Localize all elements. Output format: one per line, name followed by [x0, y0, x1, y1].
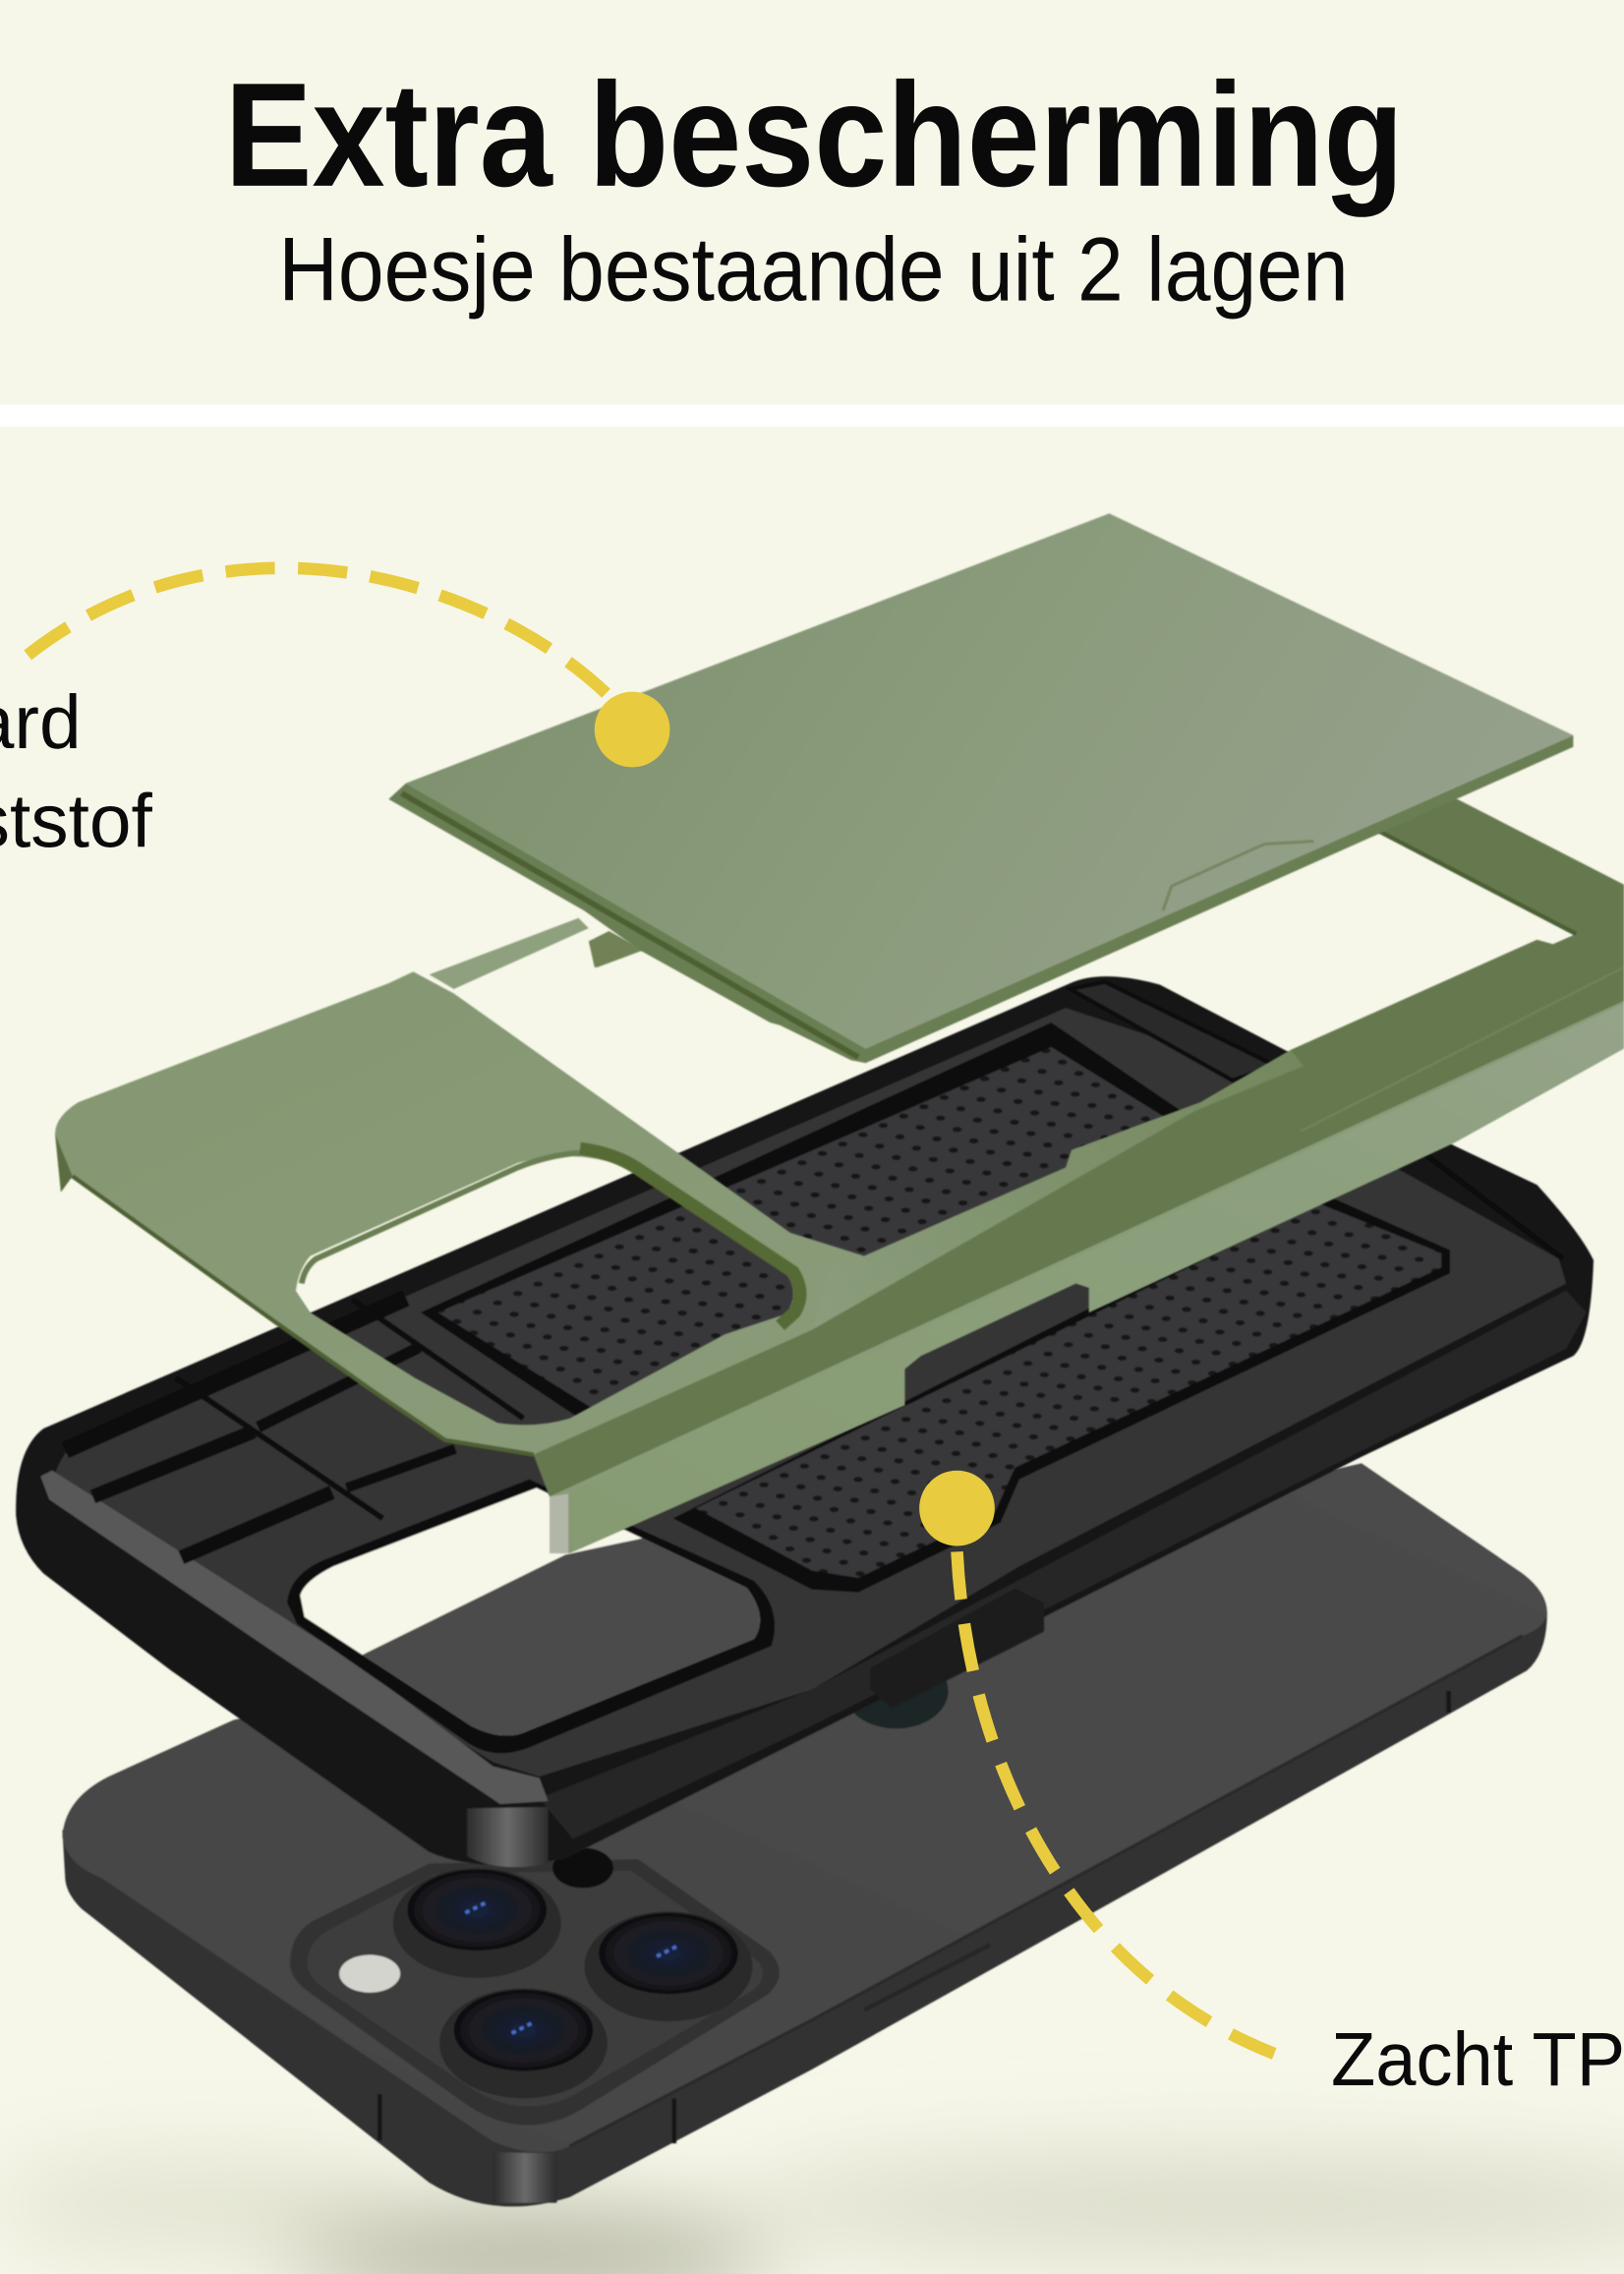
lens bottom [439, 1988, 608, 2098]
case body [16, 976, 1594, 1865]
phone side wall [62, 1566, 1547, 2206]
dark band and end bar [534, 794, 1624, 1496]
right compartment line [1414, 1145, 1563, 1258]
flash [339, 1954, 400, 1993]
phone back face [62, 1463, 1547, 2152]
side button [864, 1945, 990, 2010]
lower light strip [552, 1004, 1624, 1553]
subtitle: Hoesje bestaande uit 2 lagen [278, 219, 1349, 320]
marker dot top [595, 692, 669, 767]
upper perforated pad [421, 1022, 1233, 1429]
top compartment [1071, 982, 1276, 1080]
lid top surface [406, 513, 1573, 1049]
rim corner highlight [467, 1807, 549, 1867]
port shadow on phone [843, 1654, 949, 1728]
phone edge line [570, 1636, 1523, 2146]
camera opening [299, 1487, 761, 1736]
upper band strip [812, 1050, 1304, 1330]
frame left tab shade [55, 1135, 73, 1193]
hole rim shading right [580, 1148, 800, 1325]
phone [62, 1463, 1547, 2206]
dashed connector top [22, 568, 607, 693]
lower perforated pad [672, 1193, 1450, 1593]
title: Extra bescherming [225, 52, 1404, 217]
grey rim [40, 1471, 549, 1804]
microphone hole [552, 1847, 613, 1889]
callout: hard plastic [0, 568, 669, 864]
callout: soft TPU [919, 1471, 1624, 2102]
dashed connector bottom [957, 1551, 1277, 2055]
left compartment dividers [65, 1298, 523, 1557]
frame plate lower edge [73, 1176, 534, 1455]
hole rim shading left [302, 1153, 580, 1283]
camera island [290, 1847, 780, 2126]
frame tab [589, 931, 644, 967]
phone antenna seams [379, 1691, 1449, 2143]
lid slot outline [1163, 842, 1313, 910]
lens top [393, 1868, 561, 1978]
green hard frame [55, 794, 1624, 1553]
lid edge [388, 735, 1573, 1063]
lid edge dark line [402, 793, 858, 1057]
rail behind lid [430, 918, 589, 989]
TPU inner case [16, 976, 1594, 1867]
lower lip of case [540, 1291, 1587, 1838]
phone corner highlight [493, 2152, 556, 2203]
frame base shape [55, 794, 1624, 1553]
lens right [584, 1911, 753, 2021]
marker dot bottom [919, 1471, 995, 1545]
white divider band [0, 405, 1624, 427]
band highlight line [1301, 967, 1624, 1132]
charging port connector [870, 1588, 1044, 1709]
green lid [388, 513, 1573, 1063]
end bar inner edge [1370, 827, 1576, 934]
ground shadow [0, 2155, 1624, 2274]
case camera frame [287, 1480, 775, 1753]
corner side highlight [550, 1493, 568, 1553]
lid slot [1160, 842, 1313, 916]
case floor [52, 1008, 1566, 1777]
